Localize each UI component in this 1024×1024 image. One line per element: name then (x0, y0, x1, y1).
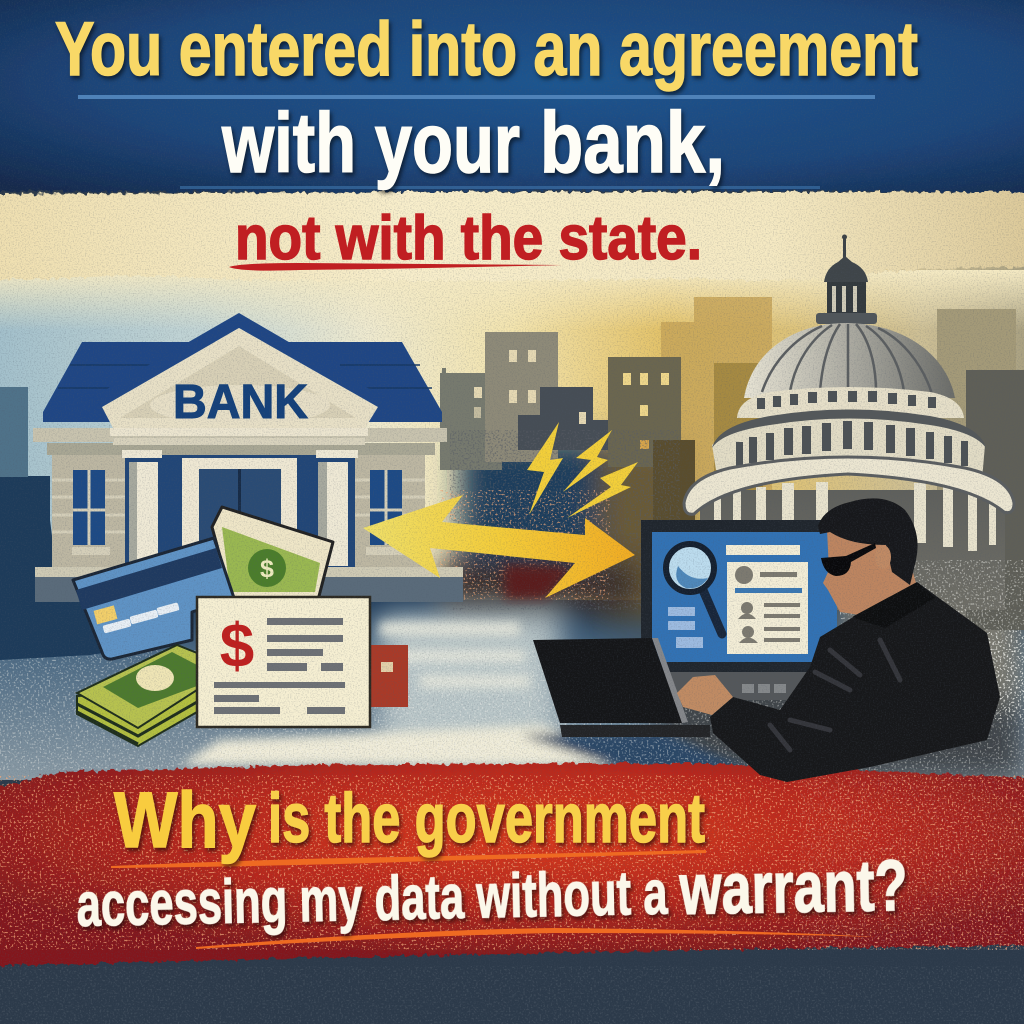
title: with your (221, 96, 520, 190)
banner: cream strip (0, 192, 1024, 281)
question text: Why (114, 775, 256, 864)
icon: credit card (73, 538, 234, 659)
laptop (533, 638, 710, 737)
banner: red bottom (0, 763, 1024, 966)
title (55, 7, 918, 273)
trees left (0, 476, 190, 660)
bank building (33, 313, 463, 602)
icon: bank statement document (197, 597, 408, 727)
footer band (0, 966, 1024, 1024)
dark speckle cloud around arrow (440, 430, 680, 610)
icon: cash stack (77, 645, 197, 746)
title: not with the state. (235, 204, 702, 273)
banner: top blue (0, 0, 1024, 192)
icon: banknote: $ (260, 555, 274, 583)
monitor with profile (641, 520, 837, 700)
speckle on scene (0, 520, 1024, 770)
icon: magnifying glass (666, 544, 722, 634)
question text: warrant? (678, 846, 908, 930)
icon: lightning bolts (527, 422, 638, 518)
city skyline (0, 297, 1024, 630)
capitol building (684, 234, 1024, 700)
title: bank, (540, 95, 725, 191)
question text: accessing my data without a (76, 859, 669, 940)
bank sign: BANK (173, 376, 308, 429)
question text: is the government (268, 779, 705, 857)
speckle on red (0, 770, 1024, 950)
agent in black with sunglasses (677, 498, 1000, 782)
question text (76, 775, 908, 949)
icon: bank statement document: $ (220, 612, 254, 681)
icon: banknote (212, 507, 333, 600)
arrow: two-way (363, 495, 635, 598)
